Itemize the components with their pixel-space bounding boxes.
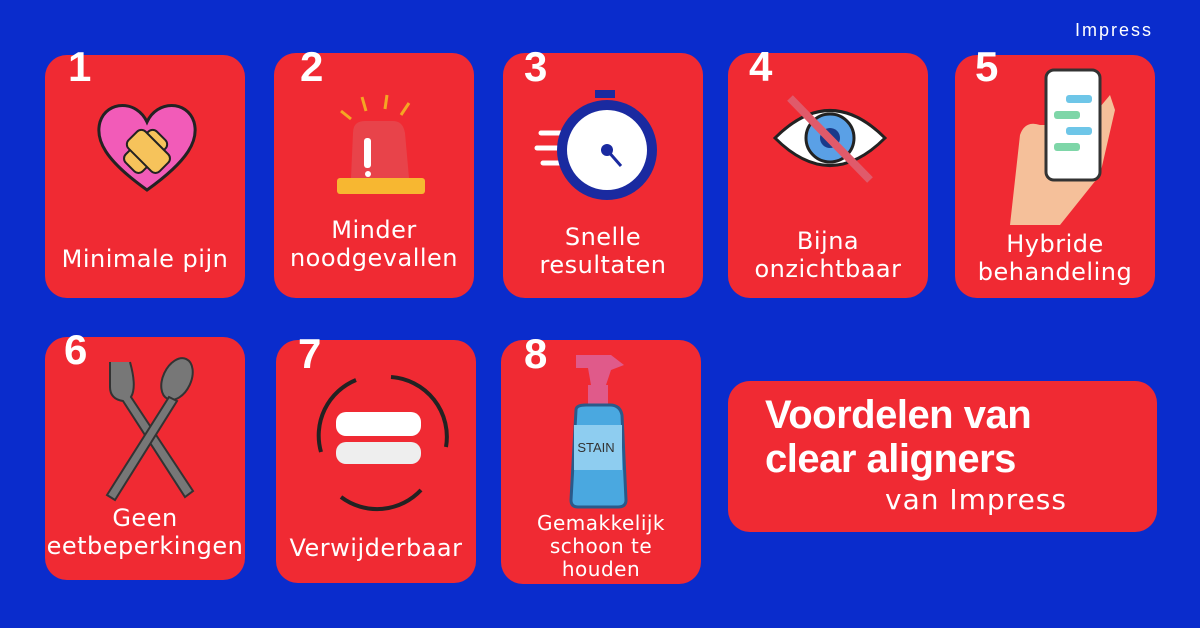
- title: clear aligners: [765, 437, 1016, 481]
- number 6: 6: [64, 326, 87, 373]
- label: eetbeperkingen: [47, 532, 243, 560]
- title: Voordelen van: [765, 393, 1031, 437]
- panel: 8 gemakkelijk schoon: [501, 340, 701, 584]
- icon: stopwatch: [534, 90, 657, 200]
- subtitle: van Impress: [885, 483, 1067, 516]
- label: onzichtbaar: [754, 255, 902, 283]
- number 8: 8: [524, 330, 547, 377]
- label: [540, 223, 666, 279]
- icon: spray bottle: STAIN: [577, 440, 615, 455]
- number 3: 3: [524, 43, 547, 90]
- panel: 3 snelle resultaten: [503, 53, 703, 298]
- label: noodgevallen: [290, 244, 458, 272]
- panel: 5 hybride behandeling: [955, 55, 1155, 298]
- label: Geen: [112, 504, 178, 532]
- label: houden: [562, 557, 640, 581]
- number 1: 1: [68, 43, 91, 90]
- label: Minimale pijn: [62, 245, 228, 273]
- label: Verwijderbaar: [289, 534, 463, 562]
- label: Snelle: [565, 223, 641, 251]
- title card: [728, 381, 1157, 532]
- label: [978, 230, 1132, 286]
- icon: heart: [97, 104, 197, 192]
- icon: hand with phone: [1010, 68, 1115, 225]
- number 5: 5: [975, 43, 998, 90]
- logo: Impress: [1075, 20, 1153, 40]
- label: Bijna: [797, 227, 859, 255]
- icon: spray bottle: [570, 355, 628, 508]
- panel: 1 minimale pijn: [45, 55, 245, 298]
- label: schoon te: [550, 534, 652, 558]
- label: [537, 511, 665, 581]
- panel: 4 bijna onzichtbaar: [728, 53, 928, 298]
- label: behandeling: [978, 258, 1132, 286]
- panel: 2 minder noodgevallen: [274, 53, 474, 298]
- label: [754, 227, 902, 283]
- icon: crossed eye: [773, 95, 887, 183]
- panel: 6 geen eetbeperkingen: [45, 337, 245, 580]
- label: Gemakkelijk: [537, 511, 665, 535]
- number 7: 7: [298, 330, 321, 377]
- panel: 7 verwijderbaar: [276, 340, 476, 583]
- label: resultaten: [540, 251, 666, 279]
- label: [47, 504, 243, 560]
- icon: aligners with arrows: [316, 375, 449, 512]
- title: [765, 393, 1031, 481]
- number 2: 2: [300, 43, 323, 90]
- icon: alarm siren: [337, 94, 425, 194]
- icon: fork and spoon: [106, 357, 194, 502]
- label: Hybride: [1006, 230, 1104, 258]
- label: [290, 216, 458, 272]
- number 4: 4: [749, 43, 772, 90]
- label: Minder: [331, 216, 417, 244]
